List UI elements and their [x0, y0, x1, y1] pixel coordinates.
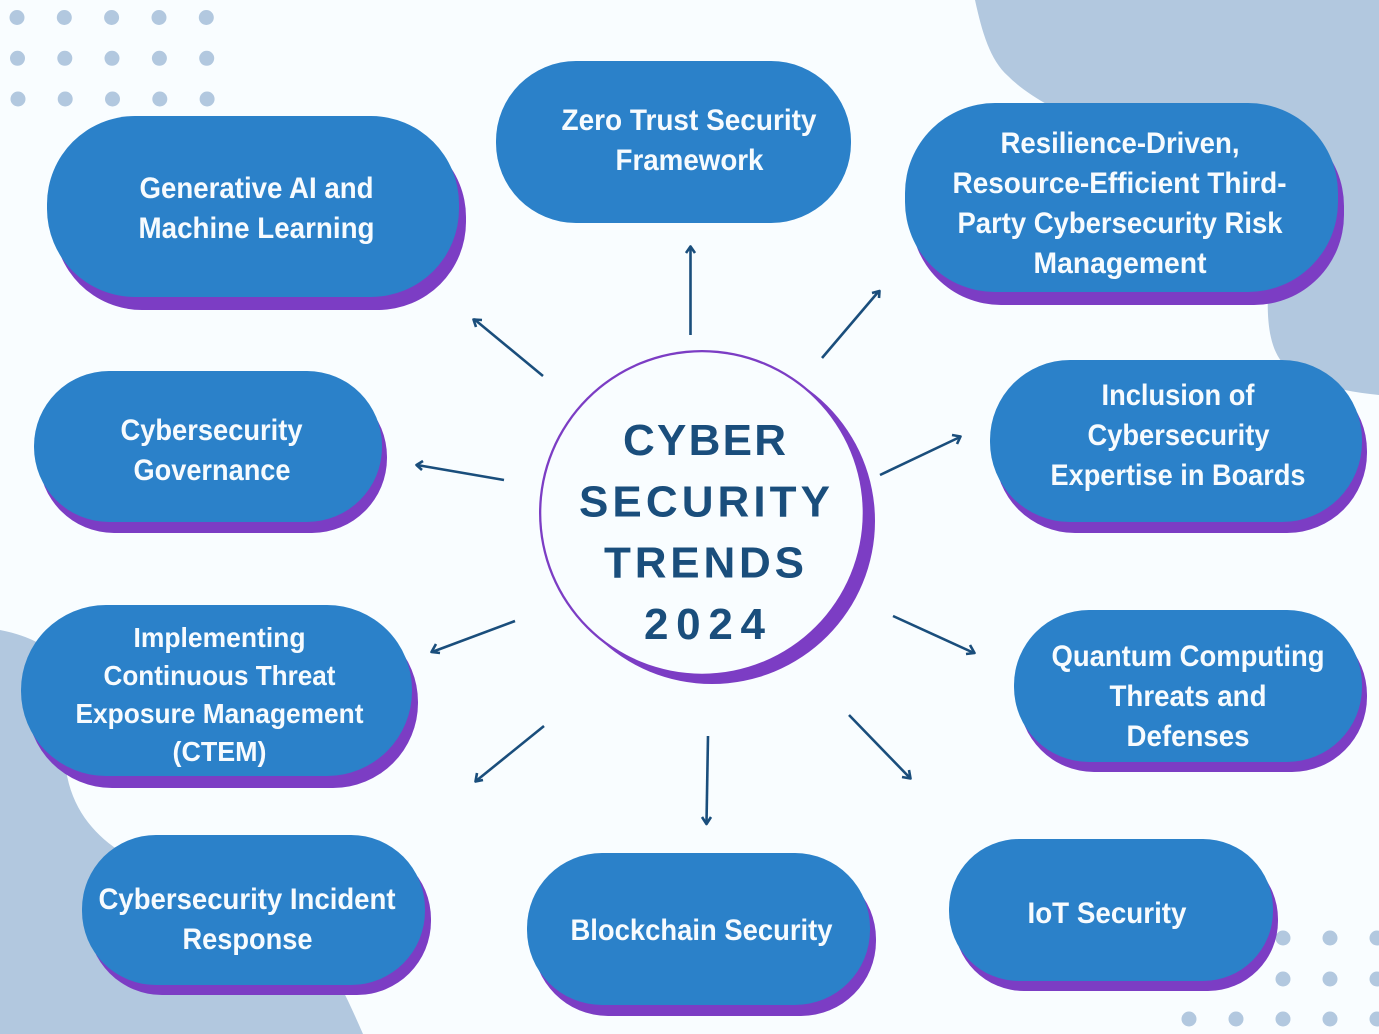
panel: CTEM: Implementing [134, 622, 306, 653]
panel: Governance: Governance [134, 454, 290, 487]
arrow: to CTEM [432, 621, 515, 653]
center circle: Cyber Security Trends 2024 [539, 350, 875, 684]
panel: Zero Trust: Framework [616, 144, 764, 177]
panel: CTEM [21, 605, 418, 788]
title: CYBER [623, 416, 786, 465]
panel: Zero Trust [496, 61, 851, 223]
arrow: to Incident Response [476, 726, 544, 782]
panel: Resilience-Driven: Resilience-Driven, [1000, 127, 1240, 160]
panel: Blockchain: Blockchain Security [570, 914, 833, 947]
decorative blob: top right [975, 0, 1379, 395]
panel: Resilience-Driven: Resource-Efficient Third- [952, 167, 1286, 200]
panel: Incident Response: Cybersecurity Incident [98, 883, 396, 916]
panel: Quantum Computing: Quantum Computing [1052, 640, 1324, 673]
panel: Inclusion of Expertise [990, 360, 1367, 533]
arrow: to Generative AI [474, 319, 543, 376]
panel: CTEM: (CTEM) [172, 736, 266, 767]
arrow: to Inclusion [880, 435, 960, 475]
arrow: to Resilience [822, 291, 880, 358]
panel: Inclusion of Expertise: Inclusion of [1102, 379, 1255, 412]
panel: Generative AI: Machine Learning [138, 212, 374, 245]
title: SECURITY [579, 478, 830, 526]
panel: Governance [34, 371, 387, 533]
panel: Resilience-Driven [905, 103, 1344, 305]
panel: Resilience-Driven: Management [1034, 247, 1207, 280]
panel: IoT Security [949, 839, 1278, 991]
panel: Inclusion of Expertise: Expertise in Boards [1050, 459, 1306, 492]
panel: Incident Response: Response [182, 923, 312, 956]
title: TRENDS [604, 538, 804, 588]
panel: Generative AI [47, 116, 466, 310]
panel: Quantum Computing: Defenses [1126, 720, 1250, 753]
panel: Governance: Cybersecurity [120, 414, 303, 447]
arrow: to Quantum [893, 616, 974, 654]
panel: Zero Trust: Zero Trust Security [562, 104, 817, 137]
panel: Incident Response [82, 835, 431, 995]
panel: Quantum Computing: Threats and [1110, 680, 1266, 713]
panel: IoT Security: IoT Security [1028, 897, 1187, 930]
panel: Generative AI: Generative AI and [140, 172, 374, 205]
dot grid: top left [10, 10, 215, 106]
panel: Inclusion of Expertise: Cybersecurity [1088, 419, 1270, 452]
arrow: to IoT [849, 715, 910, 778]
title: 2024 [644, 600, 766, 649]
arrow: to Governance [416, 461, 504, 480]
arrow: to Zero Trust [686, 246, 695, 335]
panel: Resilience-Driven: Party Cybersecurity Risk [958, 207, 1283, 240]
arrow: to Blockchain [702, 736, 711, 824]
decorative blob: bottom left [0, 630, 363, 1034]
title [579, 416, 830, 649]
panel: Quantum Computing [1014, 610, 1367, 772]
dot grid: bottom right [1182, 930, 1379, 1026]
panel: Blockchain [527, 853, 876, 1016]
panel: CTEM: Exposure Management [76, 698, 364, 729]
panel: CTEM: Continuous Threat [104, 660, 336, 691]
